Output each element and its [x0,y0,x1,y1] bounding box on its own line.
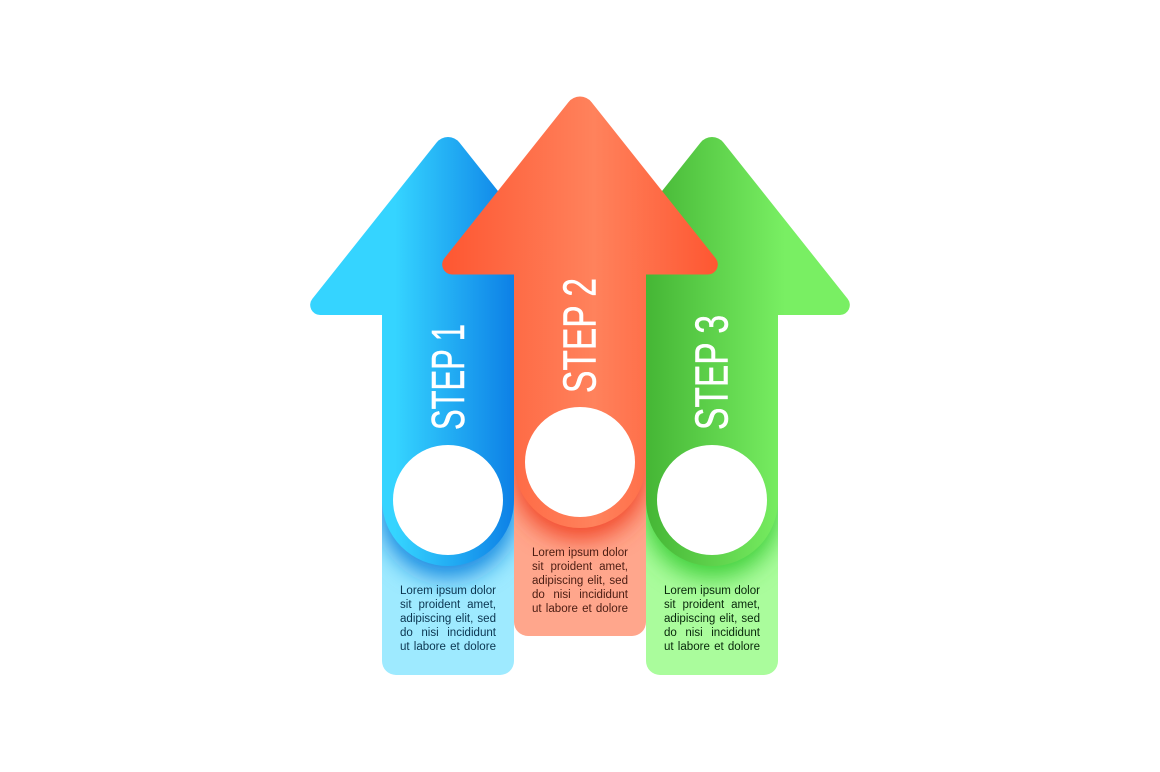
text panel: step 3 [646,480,778,675]
drop shadow: step 2 [514,464,646,557]
text panel: step 2 [514,440,646,636]
text block: step 2: Lorem ipsum dolor [532,547,628,559]
step 1: blue arrow [310,137,514,675]
step 3: green arrow [646,137,850,675]
drop shadow: step 1 [382,502,514,596]
label: STEP 1: STEP 1 [422,324,474,430]
step 2: orange arrow [442,97,718,636]
text panel: step 1 [382,480,514,675]
text block: step 1 [400,584,496,656]
arrow shape: step 2 [442,97,718,528]
text block: step 2: adipiscing elit, sed [532,575,628,587]
text block: step 2 [532,546,628,618]
text block: step 2: sit proident amet, [532,561,628,573]
text block: step 3: adipiscing elit, sed [664,613,760,625]
arrow shape: step 1 [310,137,586,566]
label: STEP 3: STEP 3 [686,315,738,430]
text block: step 1: Lorem ipsum dolor [400,585,496,597]
text block: step 3: ut labore et dolore [664,641,760,653]
icon circle: step 3 [657,445,767,555]
icon circle: step 1 [393,445,503,555]
text block: step 2: ut labore et dolore [532,603,628,615]
text block: step 1: do nisi incididunt [400,627,496,639]
text block: step 1: adipiscing elit, sed [400,613,496,625]
icon circle: step 2 [525,407,635,517]
text block: step 3: do nisi incididunt [664,627,760,639]
text block: step 3 [664,584,760,656]
text block: step 1: sit proident amet, [400,599,496,611]
label: STEP 2: STEP 2 [554,278,606,393]
text block: step 3: sit proident amet, [664,599,760,611]
text block: step 1: ut labore et dolore [400,641,496,653]
text block: step 3: Lorem ipsum dolor [664,585,760,597]
arrow shape: step 3 [574,137,850,566]
drop shadow: step 3 [646,502,778,593]
text block: step 2: do nisi incididunt [532,589,628,601]
